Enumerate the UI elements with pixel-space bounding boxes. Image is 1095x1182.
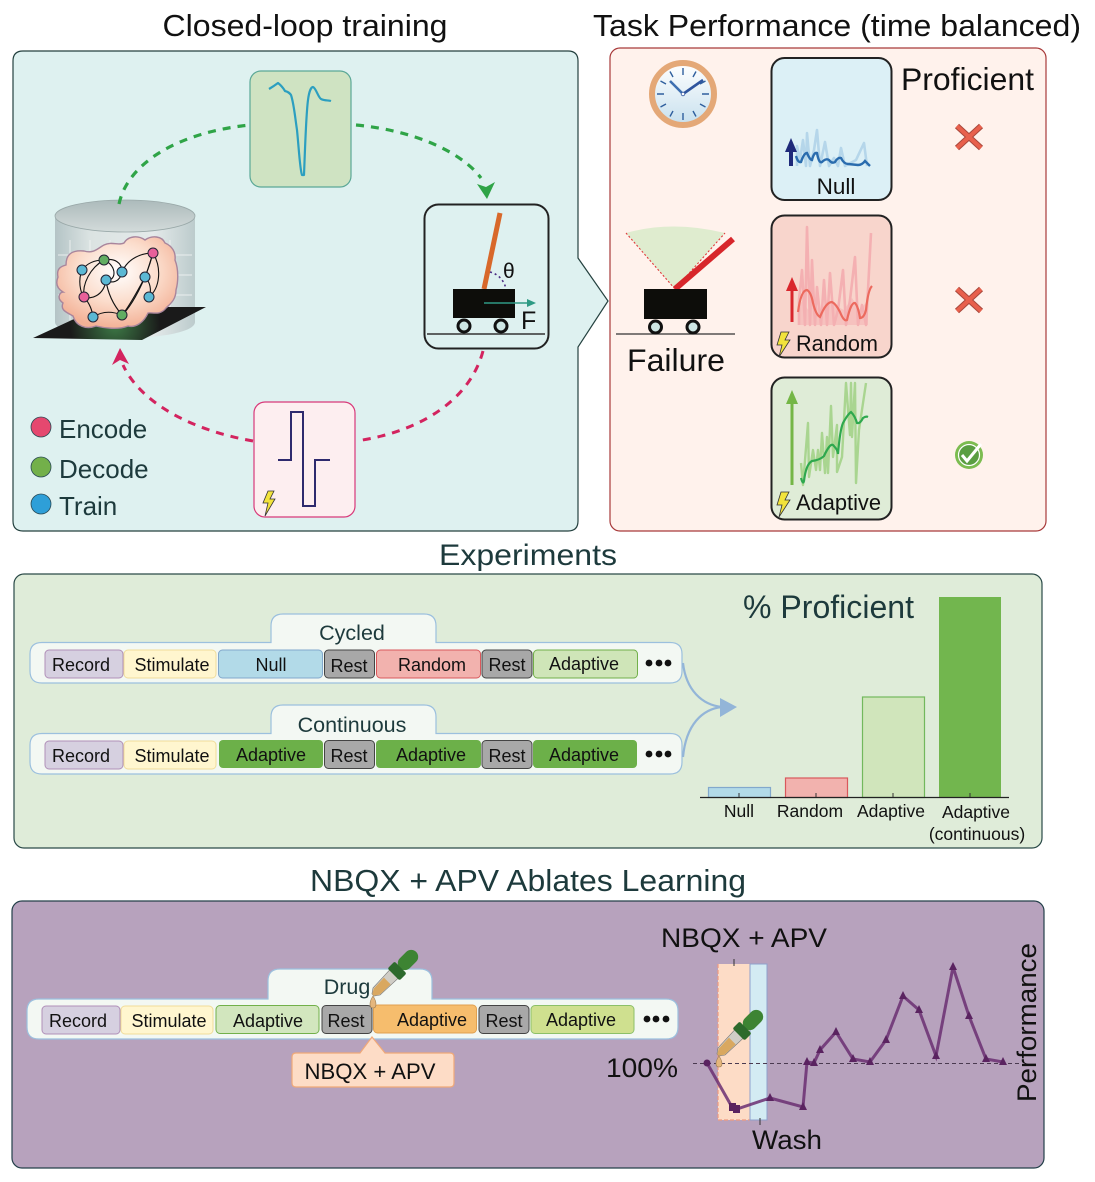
title: task performance: Task Performance (time balanced) <box>593 8 1081 43</box>
title: NBQX + APV ablates learning: NBQX + APV Ablates Learning <box>310 863 746 898</box>
sequence: continuous: Adaptive <box>396 745 466 765</box>
sequence: drug: Record <box>49 1011 107 1031</box>
icon: spike waveform <box>250 71 351 187</box>
icon: cartpole <box>424 204 548 348</box>
sequence: cycled: Stimulate <box>134 655 210 675</box>
chart: performance over time: NBQX + APV <box>661 923 827 953</box>
sequence: drug <box>27 969 678 1039</box>
card: adaptive: Adaptive <box>796 490 881 515</box>
card: random: Random <box>796 331 878 356</box>
heading: percent proficient: % Proficient <box>743 589 914 625</box>
card: null <box>772 58 892 200</box>
sequence: cycled: Null <box>255 655 287 675</box>
callout: NBQX + APV <box>292 1037 454 1087</box>
sequence: continuous <box>30 705 682 774</box>
sequence: continuous: Continuous <box>298 713 406 737</box>
bar chart: Adaptive <box>857 801 925 821</box>
sequence: drug: Rest <box>485 1011 523 1031</box>
legend: Decode <box>59 454 149 484</box>
callout: NBQX + APV: NBQX + APV <box>304 1059 436 1084</box>
icon: cross <box>957 126 981 148</box>
title: closed-loop training: Closed-loop training <box>162 8 447 43</box>
legend: Encode <box>59 414 147 444</box>
icon: dropper over drug band <box>712 1006 767 1067</box>
icon: check <box>955 441 983 469</box>
label: failure: Failure <box>627 342 725 378</box>
sequence: cycled: Adaptive <box>549 654 619 674</box>
arrow: culture to decode <box>119 125 250 204</box>
chart: performance over time: 100% <box>606 1053 678 1083</box>
icon: neural culture in dish <box>33 200 206 340</box>
icon: cross <box>957 289 981 311</box>
panel: NBQX + APV <box>12 901 1044 1168</box>
arrow: cartpole to stimulation <box>356 351 483 441</box>
sequence: continuous: Adaptive <box>236 745 306 765</box>
sequence: drug: Adaptive <box>397 1010 467 1030</box>
icon: failed cartpole <box>616 226 735 334</box>
sequence: cycled: Rest <box>488 655 526 675</box>
card: random <box>772 216 892 358</box>
sequence: drug: Rest <box>327 1011 365 1031</box>
arrow: stimulation to culture <box>112 348 253 441</box>
sequence: cycled: Record <box>52 655 110 675</box>
panel: task performance <box>610 48 1046 531</box>
sequence: cycled: Random <box>398 655 466 675</box>
icon: dropper <box>367 946 422 1008</box>
sequence: drug: Stimulate <box>131 1011 207 1031</box>
sequence: continuous: Stimulate <box>134 746 210 766</box>
bar chart: Random <box>777 801 843 821</box>
panel: closed-loop training <box>13 51 608 531</box>
panel: experiments <box>14 574 1042 848</box>
chart: performance over time: Wash <box>752 1125 822 1155</box>
legend: Train <box>59 491 117 521</box>
arrow: decode to cartpole <box>356 125 495 199</box>
sequence: cycled: Rest <box>330 656 368 676</box>
heading: proficient: Proficient <box>901 61 1034 97</box>
title: experiments: Experiments <box>439 539 617 572</box>
sequence: continuous: Rest <box>330 746 368 766</box>
bar chart <box>700 597 1025 844</box>
sequence: continuous: Record <box>52 746 110 766</box>
sequence: cycled: Cycled <box>319 621 385 645</box>
icon: clock <box>652 63 714 125</box>
sequence: drug: Adaptive <box>546 1010 616 1030</box>
icon: cartpole: θ <box>503 260 515 283</box>
legend <box>31 414 149 521</box>
bar chart: Adaptive <box>942 802 1010 822</box>
icon: cartpole: F <box>521 307 536 335</box>
icon: stimulation pulse <box>254 402 355 517</box>
chart: performance over time <box>606 923 1042 1155</box>
chart: performance over time: Performance <box>1012 943 1042 1102</box>
bar chart: Null <box>724 801 754 821</box>
sequence: continuous: Adaptive <box>549 745 619 765</box>
card: adaptive <box>772 378 892 520</box>
sequence: drug: Drug <box>324 975 370 999</box>
bar chart: (continuous) <box>929 824 1025 844</box>
arrow: sequences to chart <box>683 663 737 757</box>
sequence: cycled <box>30 614 682 683</box>
sequence: continuous: Rest <box>488 746 526 766</box>
sequence: drug: Adaptive <box>233 1011 303 1031</box>
card: null: Null <box>817 174 855 199</box>
